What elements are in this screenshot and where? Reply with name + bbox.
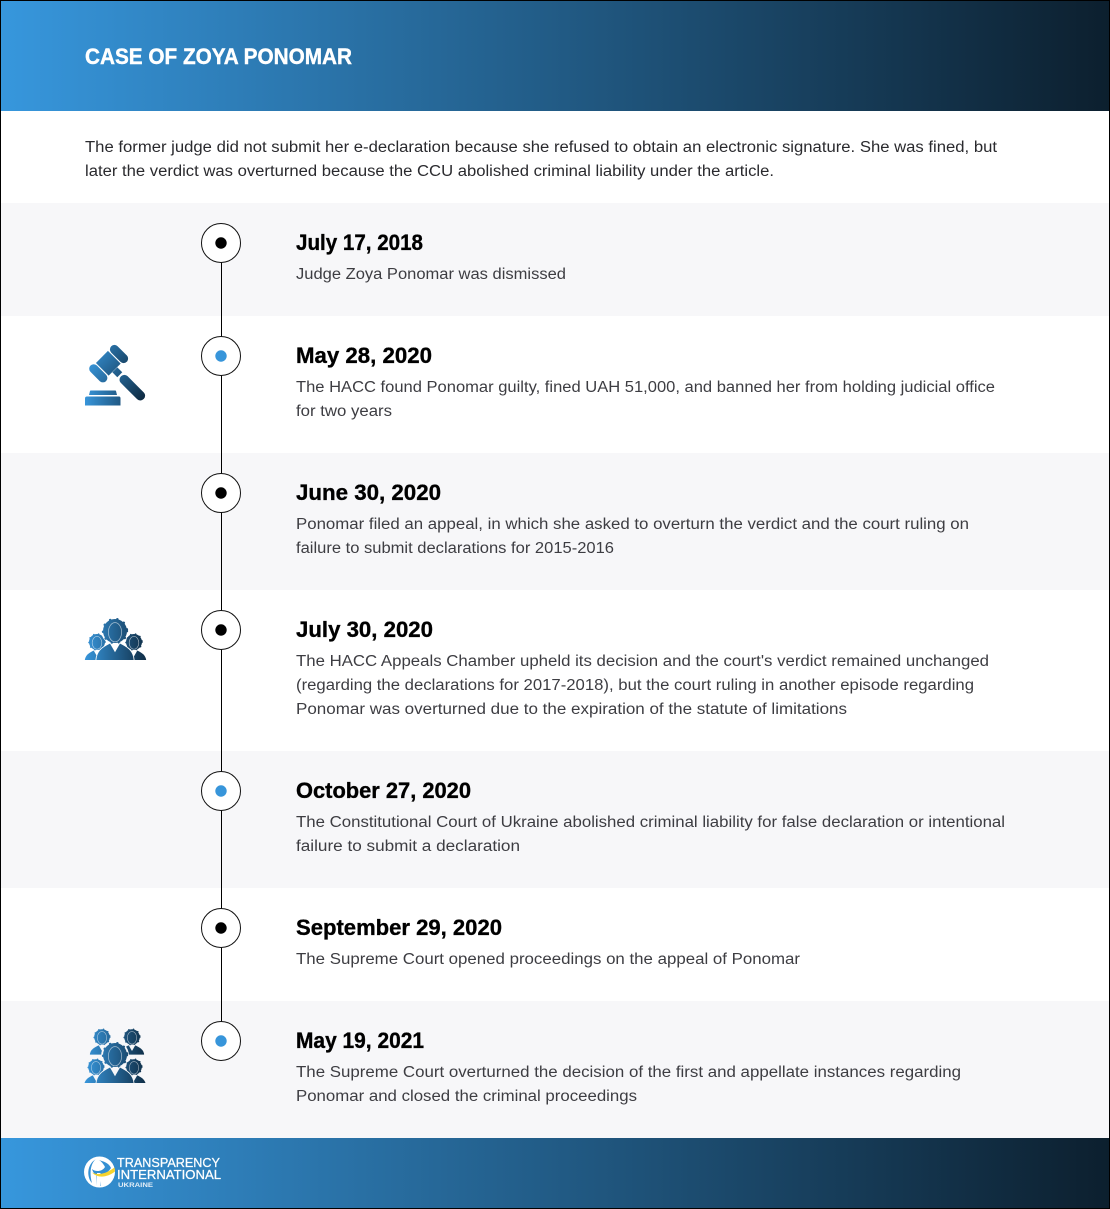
entry: May 28, 2020: May 28, 2020 (296, 343, 432, 368)
entry: October 27, 2020: failure to submit a declaration (296, 838, 520, 855)
logo: Transparency International Ukraine (84, 1155, 221, 1189)
timeline marker: September 29, 2020 (202, 908, 240, 948)
entry: September 29, 2020: The Supreme Court opened proceedings on the appeal of Ponomar (296, 951, 800, 968)
timeline marker: May 19, 2021 (202, 1022, 240, 1060)
entry: May 19, 2021: Ponomar and closed the criminal proceedings (296, 1088, 637, 1105)
icon: gavel (85, 343, 147, 406)
entry: May 28, 2020 (296, 343, 995, 420)
entry: October 27, 2020: The Constitutional Court of Ukraine abolished criminal liability for false declaration or intentional (296, 814, 1005, 831)
logo: Transparency International Ukraine: UKRAINE (118, 1182, 154, 1189)
entry: October 27, 2020: October 27, 2020 (296, 778, 471, 803)
entry: June 30, 2020: June 30, 2020 (296, 480, 441, 505)
entry: June 30, 2020: failure to submit declarations for 2015-2016 (296, 540, 614, 557)
timeline marker: June 30, 2020 (202, 474, 240, 512)
logo: Transparency International Ukraine: INTERNATIONAL (117, 1167, 221, 1182)
logo: Transparency International Ukraine: TRANSPARENCY (117, 1155, 220, 1170)
intro text: later the verdict was overturned because the CCU abolished criminal liability under the article. (85, 163, 774, 180)
entry: June 30, 2020: Ponomar filed an appeal, in which she asked to overturn the verdict and the court ruling on (296, 516, 969, 533)
entry: May 28, 2020: for two years (296, 403, 392, 420)
entry: July 30, 2020 (296, 617, 989, 718)
timeline line (221, 243, 222, 1041)
entry: July 30, 2020: The HACC Appeals Chamber upheld its decision and the court's verdict remained unchanged (296, 653, 989, 670)
intro text (85, 139, 998, 180)
title: CASE OF ZOYA PONOMAR (85, 44, 352, 69)
entry: July 30, 2020: Ponomar was overturned due to the expiration of the statute of limitations (296, 701, 847, 718)
icon: three judges (84, 618, 146, 660)
entry: September 29, 2020: September 29, 2020 (296, 915, 502, 940)
intro text: The former judge did not submit her e-declaration because she refused to obtain an electronic signature. She was fined, but (85, 139, 998, 156)
entry: June 30, 2020 (296, 480, 969, 557)
timeline marker: October 27, 2020 (202, 772, 240, 810)
entry: May 19, 2021: May 19, 2021 (296, 1028, 424, 1053)
entry: July 17, 2018: Judge Zoya Ponomar was dismissed (296, 266, 566, 283)
entry: July 17, 2018: July 17, 2018 (296, 230, 423, 255)
timeline marker: July 30, 2020 (202, 610, 240, 650)
entry: September 29, 2020 (296, 915, 800, 968)
entry: July 30, 2020: (regarding the declarations for 2017-2018), but the court ruling in another episode regarding (296, 677, 974, 694)
entry: May 19, 2021: The Supreme Court overturned the decision of the first and appellate instances regarding (296, 1064, 961, 1081)
entry: May 28, 2020: The HACC found Ponomar guilty, fined UAH 51,000, and banned her from holding judicial office (296, 379, 995, 396)
header banner (0, 0, 1110, 111)
timeline marker: May 28, 2020 (202, 336, 240, 376)
footer banner (0, 1138, 1110, 1209)
entry: July 17, 2018 (296, 230, 566, 283)
icon: logo globe (84, 1156, 115, 1188)
timeline marker: July 17, 2018 (202, 224, 240, 262)
entry: July 30, 2020: July 30, 2020 (296, 617, 433, 642)
icon: five judges (84, 1028, 146, 1083)
entry: May 19, 2021 (296, 1028, 961, 1105)
entry: October 27, 2020 (296, 778, 1005, 855)
